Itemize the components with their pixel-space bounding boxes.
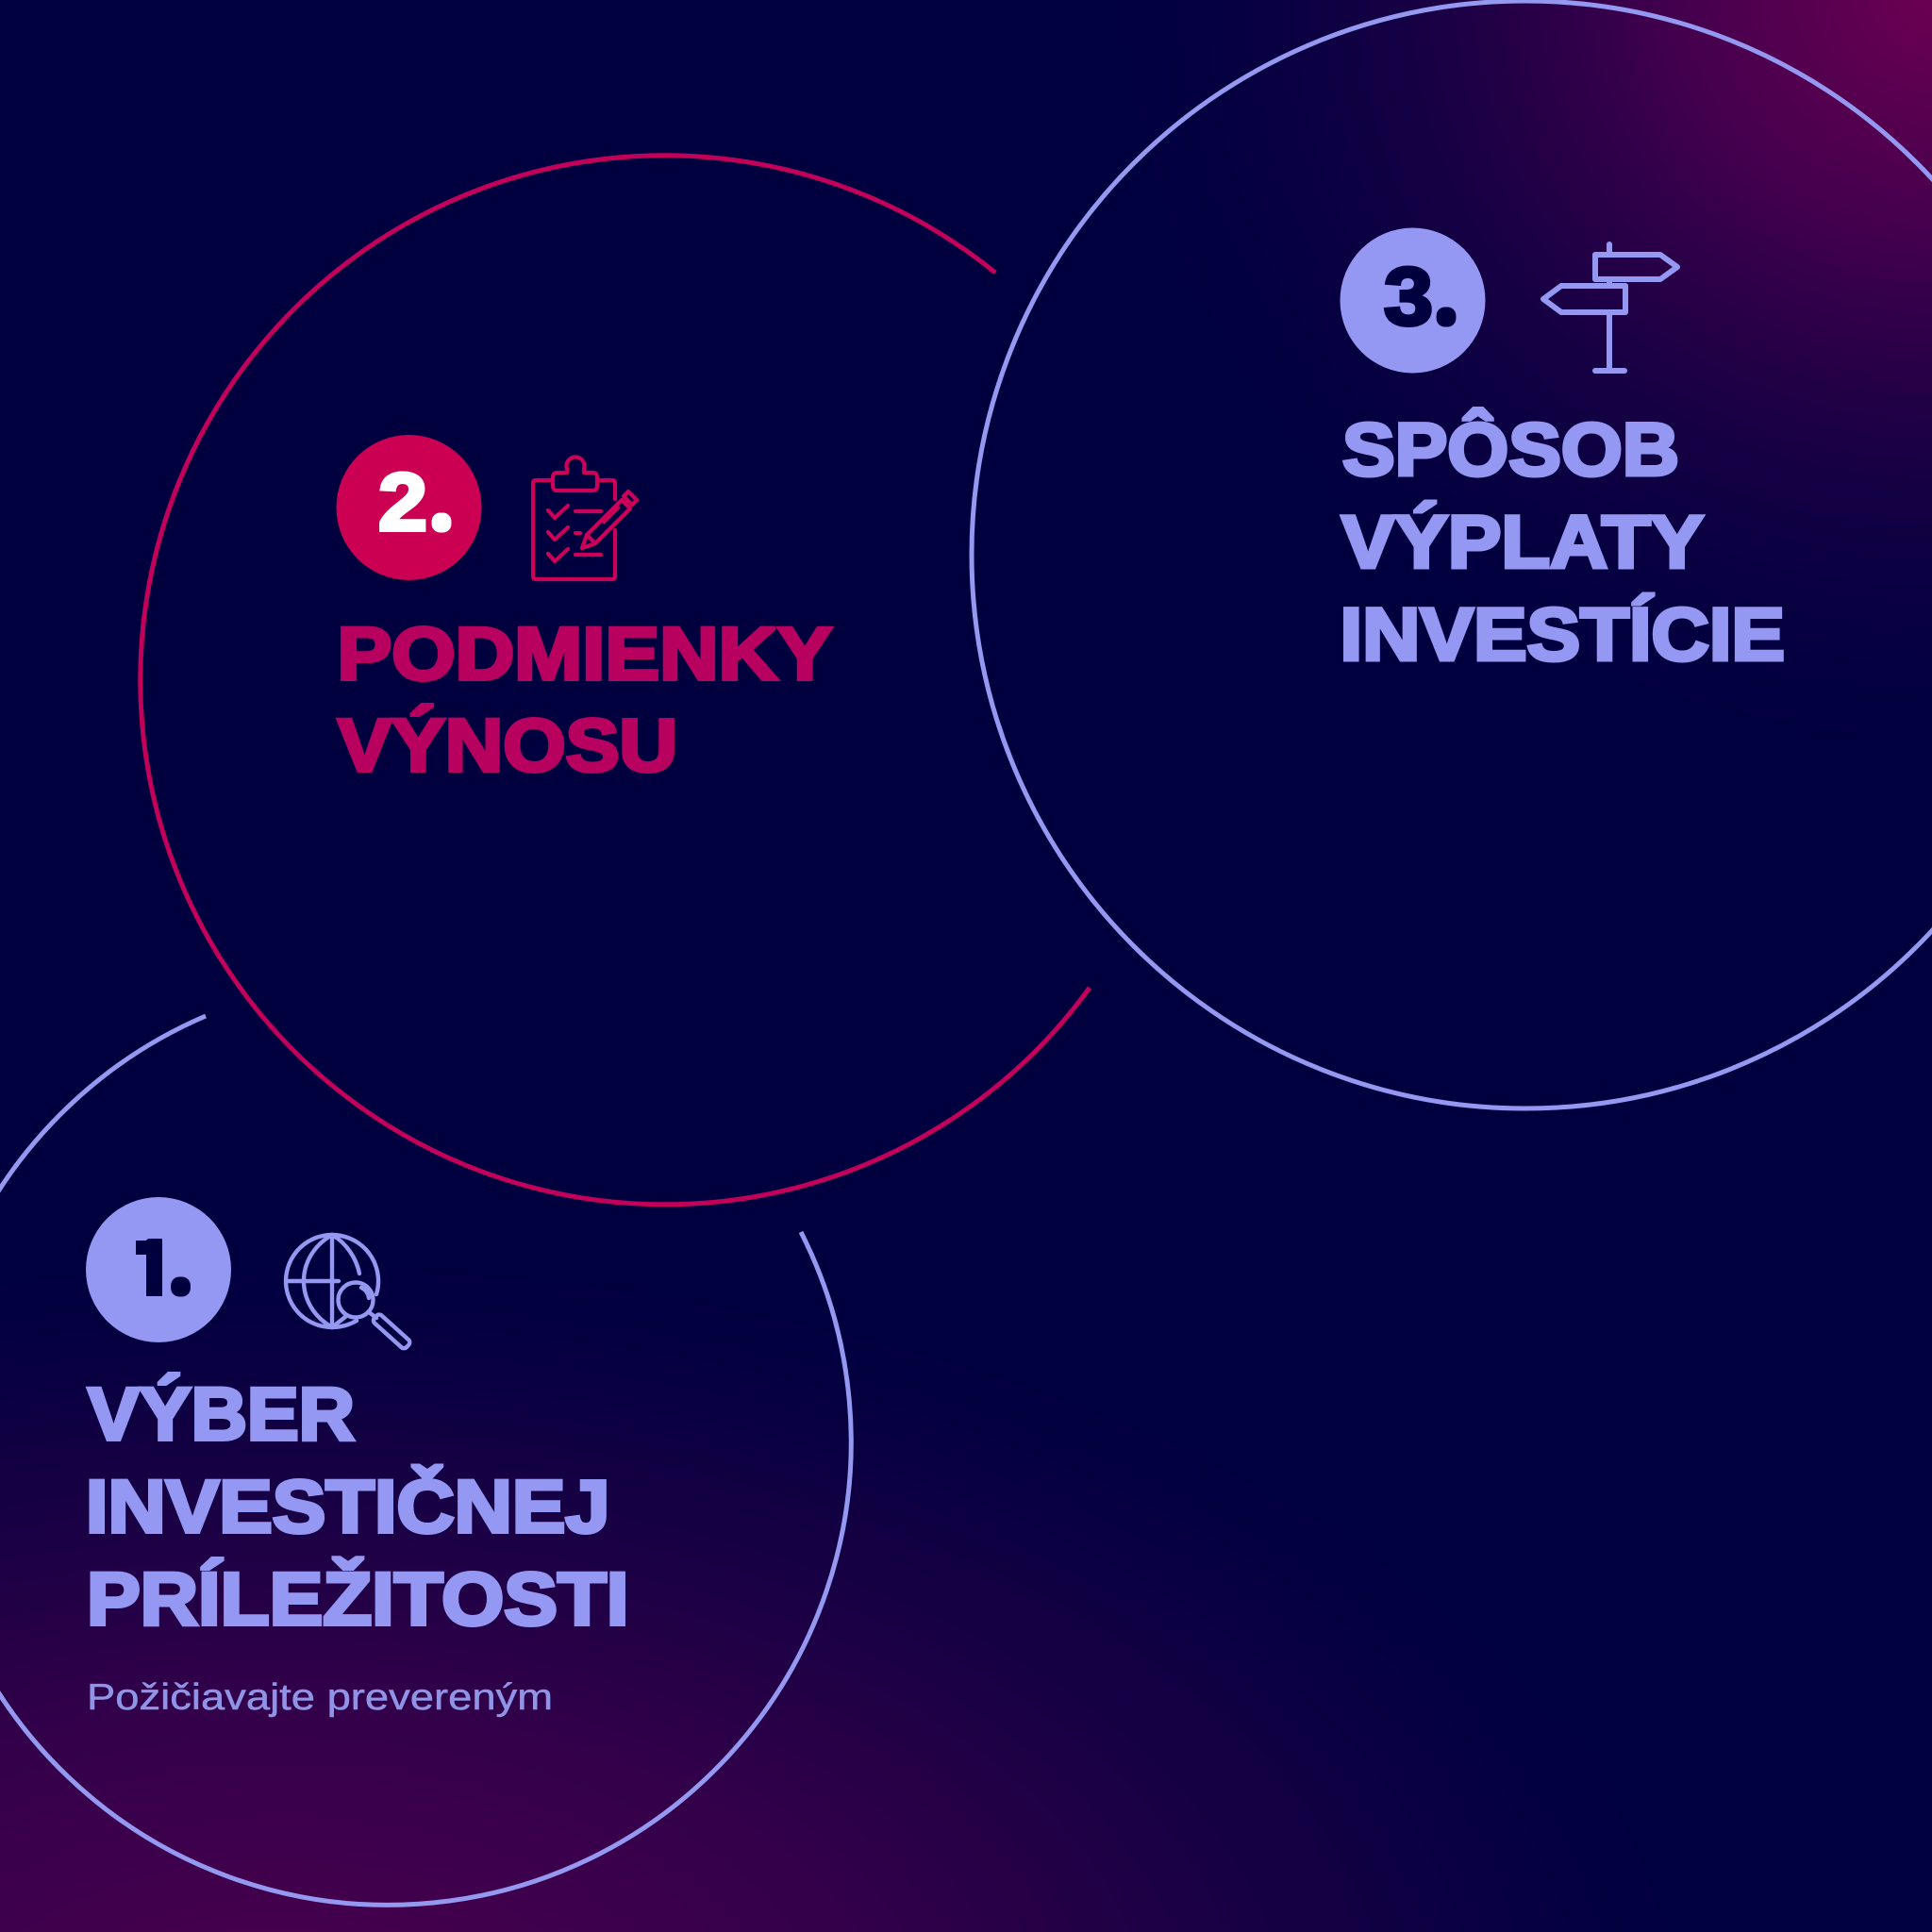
step 2 heading — [338, 612, 832, 787]
panel: step 1 circle outline — [0, 1016, 851, 1905]
step 1 number badge — [86, 1197, 231, 1342]
step 3 number badge: . — [1443, 302, 1449, 323]
panel: step 3 circle outline — [972, 1, 1932, 1108]
step 2 number badge: . — [439, 508, 444, 528]
step 1 heading: PRÍLEŽITOSTI — [87, 1557, 629, 1641]
panel: step 2 circle outline — [141, 156, 1090, 1205]
step 2 heading: PODMIENKY — [338, 612, 832, 695]
step 1 number badge: . — [178, 1272, 183, 1292]
step 3 heading: VÝPLATY — [1341, 500, 1704, 583]
step 3 number badge — [1340, 228, 1485, 374]
step 1 body text: Požičiavajte prevereným — [87, 1677, 553, 1718]
step 2 number badge — [336, 435, 481, 580]
step 1 heading: VÝBER — [88, 1373, 355, 1456]
step 3 heading: SPÔSOB — [1342, 408, 1679, 491]
step 3 heading: INVESTÍCIE — [1340, 592, 1785, 675]
step 2 number badge: 2 — [378, 458, 427, 548]
step 1 heading: INVESTIČNEJ — [86, 1465, 609, 1548]
step 1 number badge: 1 — [130, 1224, 175, 1314]
step 3 heading — [1340, 408, 1785, 675]
step 2 heading: VÝNOSU — [338, 704, 677, 787]
icon: signpost — [1543, 244, 1677, 371]
step 1 heading — [86, 1373, 629, 1641]
step 3 number badge: 3 — [1384, 252, 1433, 342]
icon: globe with magnifier — [286, 1235, 411, 1350]
icon: clipboard checklist with pencil — [533, 457, 637, 579]
